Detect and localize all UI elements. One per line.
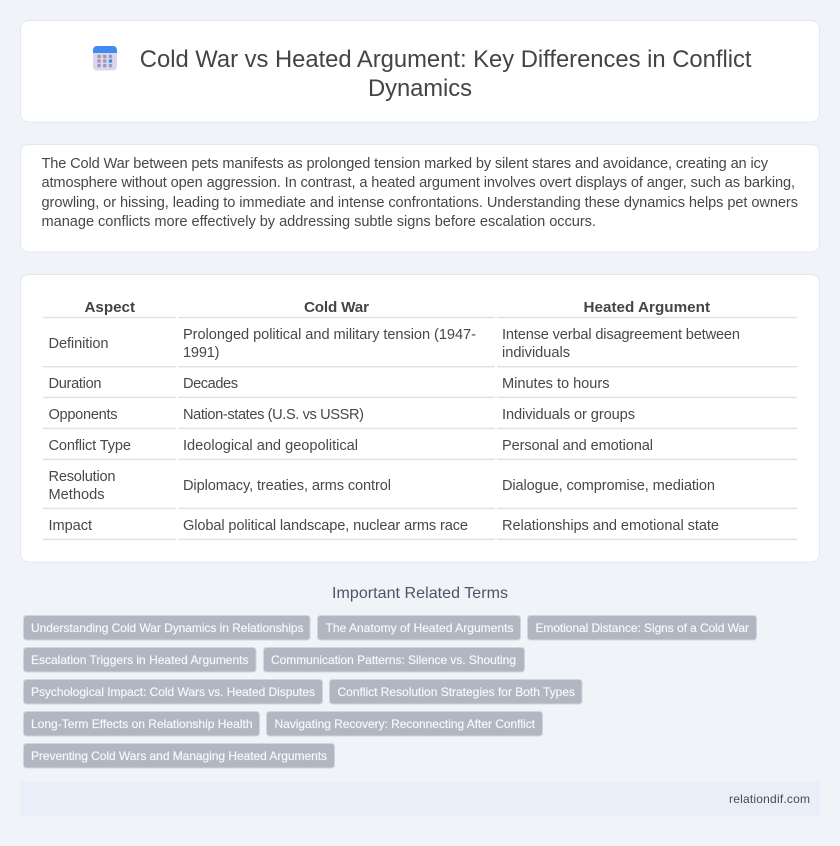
- row: definition: 1991): [183, 345, 220, 361]
- tag: [24, 648, 256, 672]
- row: opponents: Individuals or groups: [502, 407, 635, 423]
- footer: [20, 782, 820, 816]
- row: definition: Prolonged political and military tension (1947-: [183, 327, 476, 343]
- row: definition: Intense verbal disagreement between: [502, 327, 740, 343]
- row: opponents: Nation-states (U.S. vs USSR): [183, 407, 364, 423]
- tag: Preventing Cold Wars and Managing Heated Arguments: [31, 749, 327, 763]
- icon: calendar: [93, 46, 117, 70]
- panel: introduction text: growling, or hissing, leading to immediate and intense confrontations. Understanding these dynamics helps pet owners: [42, 195, 798, 211]
- row: resolution methods: Dialogue, compromise, mediation: [502, 478, 715, 494]
- row: resolution methods: Methods: [48, 487, 104, 503]
- row: impact: Global political landscape, nuclear arms race: [183, 518, 468, 534]
- panel: related term tags: [24, 616, 756, 768]
- row: conflict type: Ideological and geopolitical: [183, 438, 358, 454]
- row: impact: Relationships and emotional state: [502, 518, 719, 534]
- tag: Emotional Distance: Signs of a Cold War: [536, 621, 749, 635]
- tag: [264, 648, 524, 672]
- tag: [318, 616, 520, 640]
- panel: title header: [20, 20, 820, 122]
- row: conflict type: Personal and emotional: [502, 438, 653, 454]
- panel: introduction text: [20, 144, 820, 252]
- table header row: Heated Argument: [584, 299, 710, 316]
- tag: [528, 616, 756, 640]
- tag: Communication Patterns: Silence vs. Shouting: [271, 653, 516, 667]
- tag: Long-Term Effects on Relationship Health: [31, 717, 252, 731]
- row: duration: Minutes to hours: [502, 376, 610, 392]
- table header row: Aspect: [84, 299, 135, 316]
- row: opponents: Opponents: [48, 407, 118, 423]
- tag: [24, 680, 322, 704]
- tag: Escalation Triggers in Heated Arguments: [31, 653, 248, 667]
- tag: [24, 616, 310, 640]
- footer: relationdif.com: [729, 792, 810, 806]
- table header row: [84, 299, 710, 316]
- row: impact: [48, 518, 719, 534]
- row: duration: [48, 376, 610, 392]
- title: Cold War vs Heated Argument: Key Differences in Conflict: [140, 46, 752, 73]
- row: definition: [48, 327, 740, 361]
- row: impact: Impact: [48, 518, 92, 534]
- tag: Psychological Impact: Cold Wars vs. Heated Disputes: [31, 685, 315, 699]
- panel: introduction text: atmosphere without open aggression. In contrast, a heated argument involves overt displays of anger, such as barking,: [42, 175, 795, 191]
- row: definition: Definition: [48, 336, 108, 352]
- row: conflict type: Conflict Type: [48, 438, 131, 454]
- tag: [24, 712, 260, 736]
- title: Dynamics: [368, 75, 472, 102]
- title: [140, 46, 752, 102]
- panel: comparison table: [20, 274, 820, 562]
- row: resolution methods: Diplomacy, treaties, arms control: [183, 478, 391, 494]
- tag: [266, 712, 542, 736]
- panel: introduction text: manage conflicts more effectively by addressing subtle signs before escalation occurs.: [42, 214, 596, 230]
- row: opponents: [48, 407, 635, 423]
- tag: The Anatomy of Heated Arguments: [326, 621, 514, 635]
- row: conflict type: [48, 438, 653, 454]
- tag: Navigating Recovery: Reconnecting After Conflict: [274, 717, 536, 731]
- tag: [330, 680, 582, 704]
- tag: [24, 744, 334, 768]
- row: definition: individuals: [502, 345, 570, 361]
- row: resolution methods: [48, 469, 715, 503]
- row: duration: Duration: [48, 376, 102, 392]
- row: resolution methods: Resolution: [48, 469, 116, 485]
- tag: Conflict Resolution Strategies for Both Types: [338, 685, 575, 699]
- heading: important related terms: Important Related Terms: [332, 585, 508, 602]
- tag: Understanding Cold War Dynamics in Relationships: [31, 621, 304, 635]
- table header row: Cold War: [304, 299, 369, 316]
- panel: introduction text: The Cold War between pets manifests as prolonged tension marked by silent stares and avoidance, creating an icy: [42, 156, 769, 172]
- row: duration: Decades: [183, 376, 238, 392]
